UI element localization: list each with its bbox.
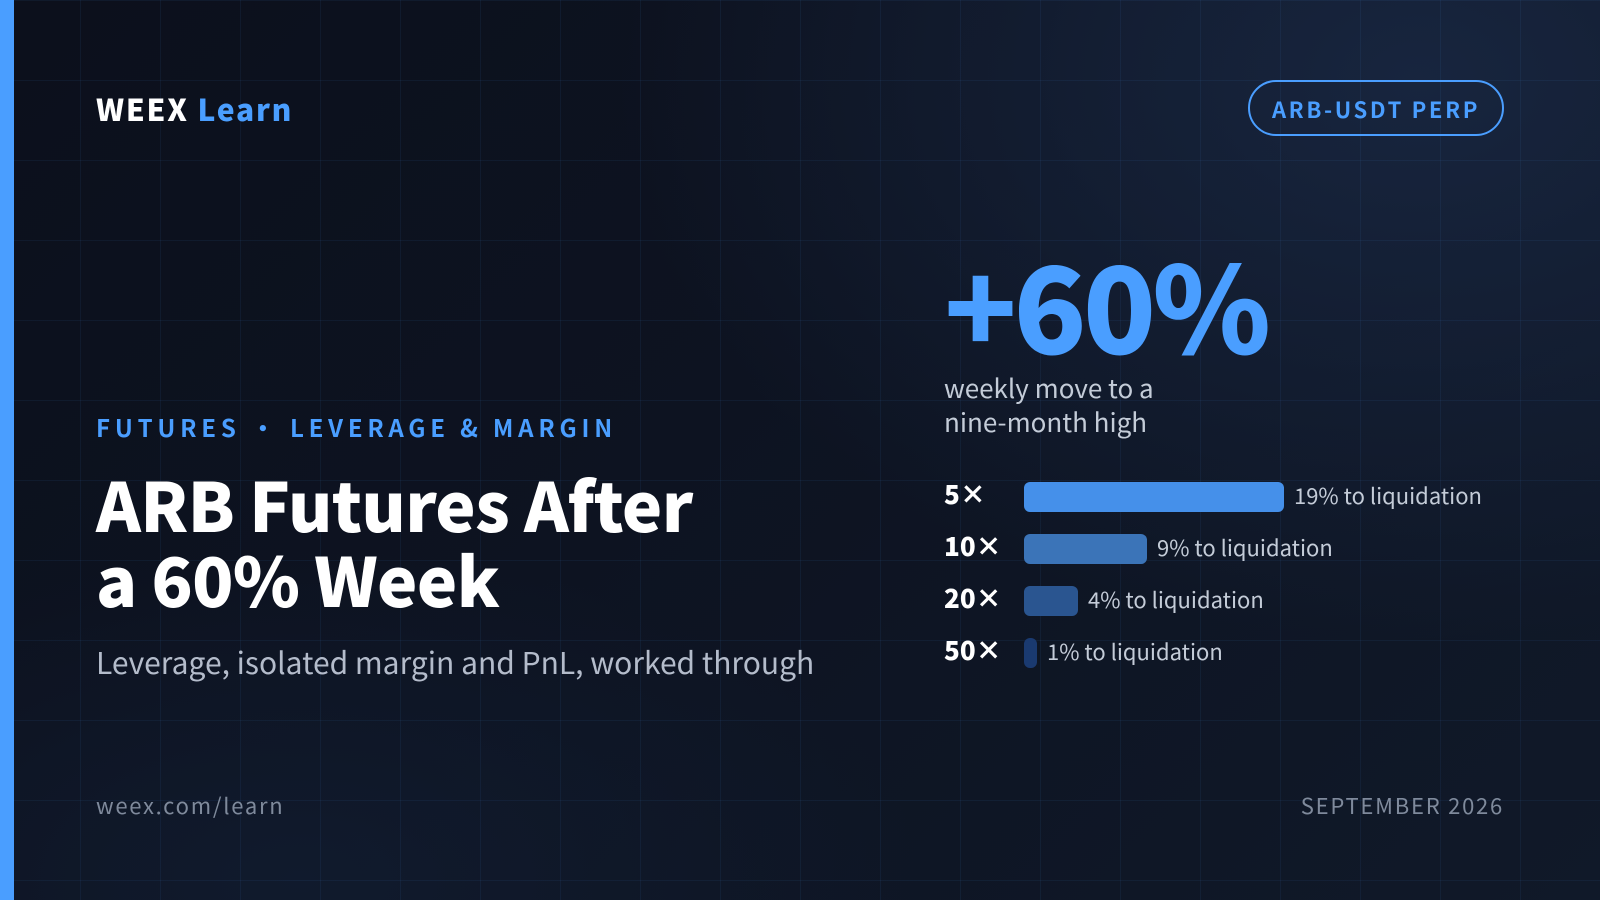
- eyebrow: FUTURES • LEVERAGE & MARGIN: [96, 409, 617, 444]
- logo: WEEX Learn: [96, 86, 293, 130]
- badge: ticker: ARB-USDT PERP: [1272, 93, 1480, 125]
- row 50x label: 50×: [944, 631, 1002, 668]
- badge: ticker: [1248, 80, 1504, 136]
- row 20x value: 4% to liquidation: [1088, 583, 1264, 615]
- row 50x value: 1% to liquidation: [1047, 635, 1223, 667]
- stat caption: [944, 369, 1154, 440]
- big stat: +60%: [944, 215, 1267, 389]
- bar chart: [944, 475, 1482, 668]
- stat caption: nine-month high: [944, 403, 1147, 440]
- title: ARB Futures After: [96, 453, 693, 552]
- footer date: SEPTEMBER 2026: [1301, 789, 1504, 821]
- title: [96, 453, 694, 627]
- footer url: weex.com/learn: [96, 789, 284, 821]
- row 5x label: 5×: [944, 475, 986, 512]
- row 5x bar: [1024, 482, 1284, 512]
- title: a 60% Week: [96, 528, 499, 627]
- row 5x value: 19% to liquidation: [1294, 479, 1482, 511]
- stat caption: weekly move to a: [944, 369, 1154, 406]
- row 10x label: 10×: [944, 527, 1002, 564]
- accent bar: [0, 0, 14, 900]
- row 10x bar: [1024, 534, 1147, 564]
- row 50x bar: [1024, 638, 1037, 668]
- row 20x label: 20×: [944, 579, 1002, 616]
- row 20x bar: [1024, 586, 1078, 616]
- subtitle: Leverage, isolated margin and PnL, worked through: [96, 639, 814, 683]
- row 10x value: 9% to liquidation: [1157, 531, 1333, 563]
